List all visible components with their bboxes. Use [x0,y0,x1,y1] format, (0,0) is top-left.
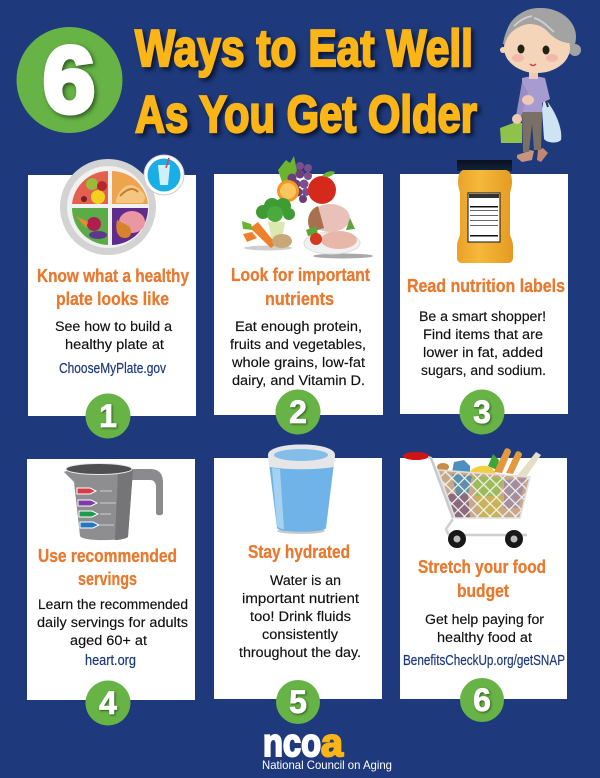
number badge 2: 2 [289,394,307,430]
body text [55,319,173,352]
icon: jar with nutrition label [457,160,513,263]
title: As You Get Older [135,86,477,144]
body text: important nutrient [242,591,359,606]
body text: whole grains, low-fat [231,355,365,370]
icon: grandmother with shopping bags [500,8,581,162]
number badge 6: 6 [473,682,491,718]
body text: dairy, and Vitamin D. [232,373,365,388]
title [135,20,477,144]
number badge 4 [86,680,130,726]
body text: Learn the recommended [38,597,188,612]
panel 6: food budget [400,448,567,699]
logo: ncoa: a [321,722,343,765]
icon: measuring cup [64,464,163,540]
logo: ncoa: nco [263,722,321,765]
heading: Use recommended [38,546,177,566]
number badge 5: 5 [289,684,307,720]
body text: throughout the day. [239,645,361,660]
icon: shopping cart with groceries [403,448,541,548]
body text: daily servings for adults [37,615,188,630]
body text [419,309,546,378]
number badge 5 [276,680,320,724]
body text: aged 60+ at [70,633,147,648]
heading: Know what a healthy [37,266,189,286]
link: heart.org [85,653,136,669]
body text: consistently [262,627,338,642]
title: Ways to Eat Well [135,20,473,78]
body text: Be a smart shopper! [419,309,546,324]
number badge 1: 1 [99,398,117,434]
body text [230,319,366,388]
big number six badge: 6 [43,27,95,132]
heading [37,266,189,309]
big number six badge [16,27,122,133]
body text: Find items that are [423,327,543,342]
heading: plate looks like [56,289,169,309]
icon: plate with food groups [60,159,156,255]
number badge 3 [460,390,504,434]
number badge 1 [86,394,130,438]
logo: ncoa [262,722,392,772]
logo: ncoa: National Council on Aging [262,758,392,772]
body text: too! Drink fluids [250,609,351,624]
link: BenefitsCheckUp.org/getSNAP [403,653,565,669]
number badge 3: 3 [473,394,491,430]
body text [425,612,545,645]
body text: Water is an [270,573,341,588]
heading [38,546,177,589]
body text: fruits and vegetables, [230,337,366,352]
heading: servings [78,569,137,589]
heading: nutrients [265,289,334,309]
panel 3: nutrition labels [400,160,568,414]
panel 5: stay hydrated [214,444,382,699]
body text: healthy plate at [65,337,164,352]
icon: glass of water badge [144,155,184,195]
body text: healthy food at [437,630,532,645]
panel 4: recommended servings [27,459,195,700]
heading: Look for important [231,265,370,285]
heading [231,265,370,309]
body text: sugars, and sodium. [421,363,546,378]
body text: lower in fat, added [423,345,543,360]
heading: Read nutrition labels [407,276,565,296]
link: ChooseMyPlate.gov [59,361,167,377]
panel 2: important nutrients [214,156,383,415]
panel 1: healthy plate [28,155,196,416]
heading [418,557,546,601]
body text: Eat enough protein, [235,319,362,334]
body text [239,573,361,660]
icon: fruit and vegetables [242,156,373,258]
body text: See how to build a [55,319,173,334]
number badge 2 [276,390,320,434]
heading: Stay hydrated [248,542,350,562]
body text: Get help paying for [425,612,545,627]
number badge 4: 4 [99,685,117,721]
icon: glass of water [268,444,335,534]
heading: Stretch your food [418,557,546,577]
heading: budget [457,581,509,601]
number badge 6 [460,678,504,722]
body text [37,597,188,648]
